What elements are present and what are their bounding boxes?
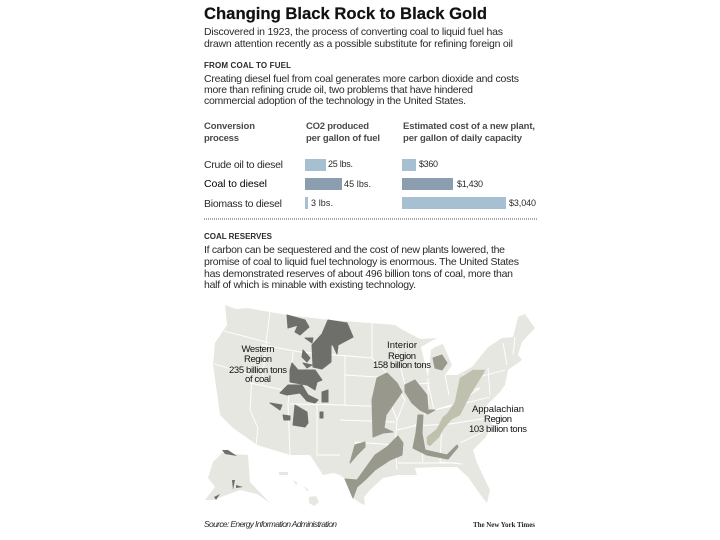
row labels: Biomass to diesel: [204, 198, 282, 210]
label: Appalachian Region: 103 billion tons: [469, 424, 527, 435]
column header: conversion process: Conversion: [204, 121, 255, 132]
contiguous US: [213, 305, 535, 505]
label: Interior Region: [373, 340, 431, 371]
bar chart: CO2 produced: [305, 159, 371, 209]
column header: estimated cost: Estimated cost of a new plant,: [403, 121, 535, 132]
label: Interior Region: 158 billion tons: [373, 360, 431, 371]
intro text: [204, 26, 513, 50]
text block: from coal to fuel: [204, 73, 519, 107]
column header: estimated cost: [403, 121, 535, 144]
label: Appalachian Region: Region: [484, 414, 512, 425]
row labels: Crude oil to diesel: [204, 159, 283, 171]
state borders: [214, 312, 515, 470]
coal: Appalachian region: [427, 370, 485, 446]
table: conversion comparison: [204, 121, 536, 210]
label: Interior Region: Region: [388, 351, 416, 362]
label: Appalachian Region: [469, 404, 527, 435]
bar chart: plant cost: $1,430: [457, 179, 483, 189]
bar chart: CO2 produced: 25 lbs.: [328, 159, 353, 169]
text block: coal reserves: If carbon can be sequestered and the cost of new plants lowered, the: [204, 244, 505, 256]
coal: Western region: [270, 315, 353, 427]
column header: CO2 produced: CO2 produced: [306, 121, 369, 132]
label: Appalachian Region: Appalachian: [472, 404, 524, 415]
column header: CO2 produced: per gallon of fuel: [306, 133, 380, 144]
column header: conversion process: [204, 121, 255, 144]
source: Source: Energy Information Administration: [204, 519, 337, 529]
heading: coal reserves: COAL RESERVES: [204, 232, 273, 241]
label: Western Region: of coal: [245, 374, 271, 385]
column header: conversion process: process: [204, 133, 239, 144]
label: Western Region: 235 billion tons: [229, 365, 287, 376]
coal: Interior region: [345, 355, 458, 498]
label: Western Region: [229, 344, 287, 385]
bar chart: plant cost: $3,040: [509, 198, 536, 208]
coal: Alaska deposits: [214, 450, 243, 500]
text block: from coal to fuel: more than refining crude oil, two problems that have hindered: [204, 84, 473, 96]
title: Changing Black Rock to Black Gold: [204, 4, 487, 23]
column header: CO2 produced: [306, 121, 380, 144]
bar chart: CO2 produced: 3 lbs.: [311, 198, 333, 208]
label: Western Region: Region: [244, 354, 272, 365]
intro text: drawn attention recently as a possible substitute for refining foreign oil: [204, 38, 513, 50]
text block: from coal to fuel: Creating diesel fuel from coal generates more carbon dioxide and costs: [204, 73, 519, 85]
bar chart: plant cost: [402, 159, 536, 209]
row labels: [204, 159, 283, 210]
text block: coal reserves: half of which is minable with existing technology.: [204, 279, 416, 291]
credit: The New York Times: [473, 521, 535, 529]
Alaska: [205, 453, 270, 503]
text block: coal reserves: promise of coal to liquid fuel technology is enormous. The United States: [204, 256, 519, 268]
bar chart: plant cost: $360: [419, 159, 438, 169]
text block: coal reserves: [204, 244, 519, 291]
heading: from coal to fuel: FROM COAL TO FUEL: [204, 61, 291, 70]
column header: estimated cost: per gallon of daily capacity: [403, 133, 523, 144]
row labels: Coal to diesel: [204, 178, 267, 190]
text block: coal reserves: has demonstrated reserves of about 496 billion tons of coal, more than: [204, 268, 513, 280]
bar chart: CO2 produced: 45 lbs.: [344, 179, 371, 189]
map: US coal regions: [205, 305, 535, 506]
label: Interior Region: Interior: [387, 340, 417, 351]
label: Western Region: Western: [242, 344, 274, 355]
intro text: Discovered in 1923, the process of converting coal to liquid fuel has: [204, 26, 503, 38]
text block: from coal to fuel: commercial adoption of the technology in the United States.: [204, 95, 466, 107]
Hawaii: [279, 472, 319, 506]
